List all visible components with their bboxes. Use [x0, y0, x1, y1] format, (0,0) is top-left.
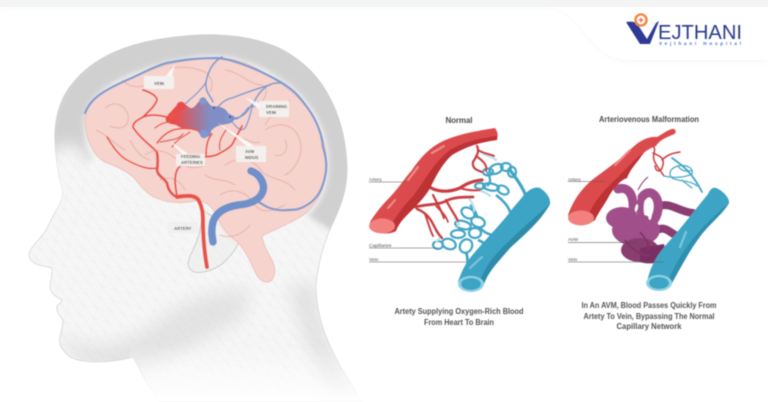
- large vein: [212, 171, 263, 242]
- head silhouette: [29, 35, 362, 402]
- mesh: [0, 0, 400, 402]
- label: avm nidus: NIDUS: [245, 155, 259, 160]
- forehead highlight: [55, 140, 90, 196]
- arteries: [107, 90, 242, 267]
- label: artery: ARTERY: [174, 226, 192, 231]
- icon: orange cross circle: [636, 14, 646, 26]
- label: avm: AVM: [568, 237, 578, 243]
- head shading: [54, 34, 348, 378]
- brain folds: [96, 67, 301, 237]
- label: draining vein: VEIN: [266, 110, 276, 115]
- label: vein: [144, 64, 175, 89]
- caption: avm: [582, 301, 716, 331]
- label: feeding arteries: [170, 141, 205, 166]
- label: artery: [168, 222, 198, 233]
- header band with logo tab: [0, 0, 768, 62]
- heading: normal: Normal: [446, 116, 472, 125]
- openings in mass: [635, 199, 652, 220]
- label lines: avm: [568, 177, 664, 263]
- label: vein: Vein: [568, 257, 578, 263]
- brain labels: [144, 64, 289, 233]
- pale capillary joins: [436, 154, 496, 241]
- capillaries red: [415, 146, 494, 238]
- tagline: Vejthani Hospital: [659, 41, 741, 46]
- ear: [188, 205, 241, 272]
- panel: normal: [369, 116, 550, 327]
- icon: v mark: [626, 21, 659, 44]
- back of neck shading: [291, 282, 338, 377]
- caption: avm: Artety To Vein, Bypassing The Normal: [584, 312, 714, 321]
- under chin shading: [70, 290, 246, 364]
- capillaries blue: [433, 162, 526, 266]
- label: artery: Artery: [568, 177, 581, 183]
- artery tube: [370, 128, 498, 234]
- label: draining vein: DRAINING: [266, 104, 288, 109]
- caption: avm: In An AVM, Blood Passes Quickly From: [582, 301, 716, 310]
- wordmark: EJTHANI: [658, 22, 742, 44]
- label: feeding arteries: ARTERIES: [181, 160, 203, 165]
- caption: normal: Artety Supplying Oxygen-Rich Blood: [394, 307, 524, 316]
- caption: normal: [394, 307, 524, 327]
- illustration: head with brain: [28, 34, 351, 386]
- bottom fade: [130, 345, 370, 402]
- label lines: normal: [369, 177, 466, 263]
- label: artery: Artery: [369, 177, 382, 183]
- caption: avm: Capillary Network: [616, 322, 682, 331]
- brain: [85, 58, 327, 282]
- label: avm nidus: [217, 122, 266, 162]
- label: draining vein: [245, 97, 289, 117]
- caption: normal: From Heart To Brain: [424, 318, 494, 327]
- label: feeding arteries: FEEDING: [181, 154, 201, 159]
- vein tube: [458, 187, 550, 290]
- vein tube: [647, 188, 729, 290]
- avm vessel mass: [618, 188, 693, 256]
- panel: arteriovenous malformation: [568, 115, 729, 331]
- heading: avm: Arteriovenous Malformation: [599, 115, 699, 124]
- label: capillaries: Capillaries: [369, 243, 392, 249]
- logo: vejthani: [626, 14, 742, 46]
- vein network: [85, 57, 326, 210]
- skull band: [49, 27, 352, 232]
- label: vein: Vein: [369, 257, 379, 263]
- nidus: [166, 97, 235, 138]
- artery tube: [568, 129, 676, 224]
- avm capillary remnants: [653, 146, 702, 192]
- label: vein: VEIN: [154, 81, 164, 86]
- label: avm nidus: AVM: [245, 149, 255, 154]
